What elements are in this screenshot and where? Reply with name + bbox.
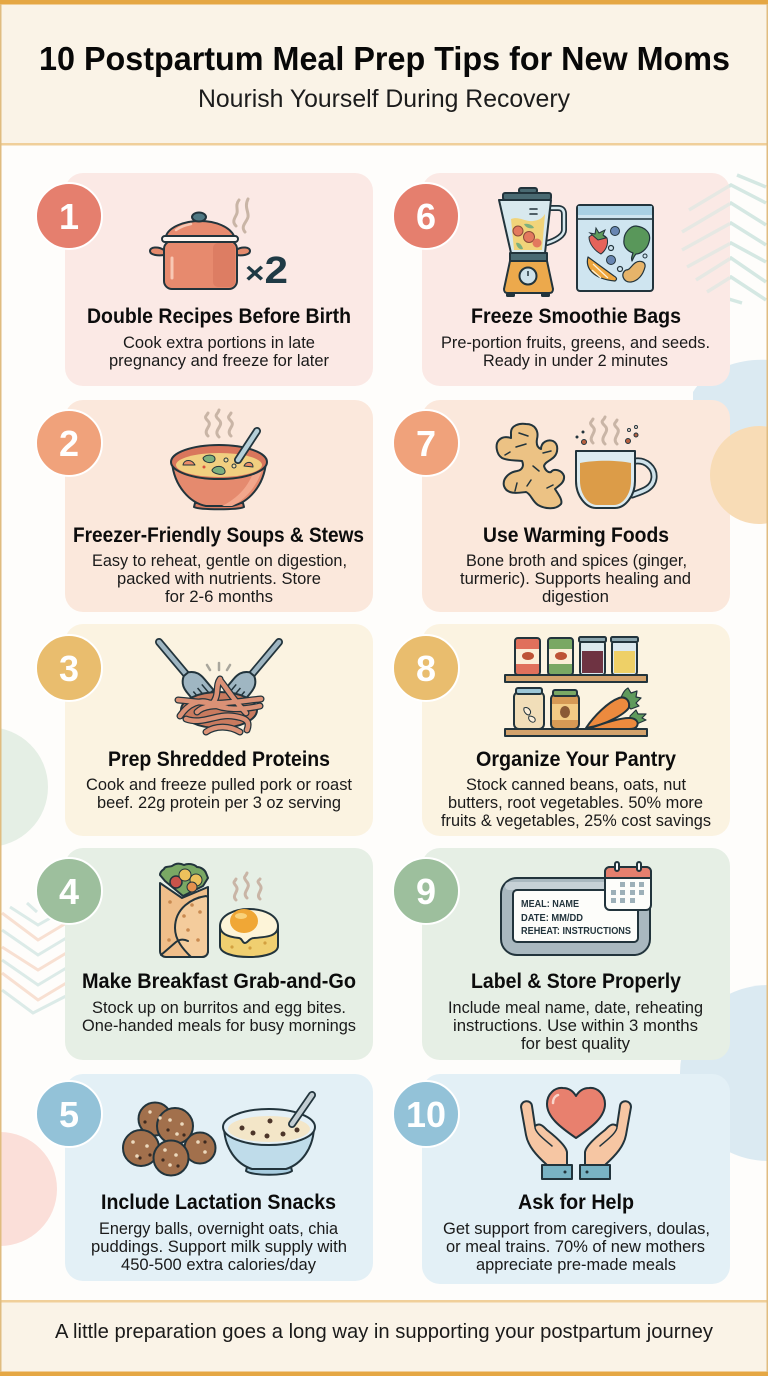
description: tip 6: Pre-portion fruits, greens, and seeds. [441,334,710,352]
heading: tip 5: Include Lactation Snacks [101,1191,336,1214]
description: tip 7 [460,552,691,606]
number badge 5: 5 [59,1094,79,1135]
number badge 8 [393,635,459,701]
number badge 3 [36,635,102,701]
description: tip 9: instructions. Use within 3 months [453,1017,698,1035]
description: tip 5 [91,1220,347,1274]
panel: tip 4 breakfast [36,848,373,1060]
icon: labelled container with calendar: MEAL: NAME [521,898,579,910]
description: tip 1: Cook extra portions in late [123,334,315,352]
description: tip 5: 450-500 extra calories/day [121,1256,317,1274]
panel: tip 2 soups [36,400,373,612]
heading: tip 9: Label & Store Properly [471,970,681,993]
icon: pantry shelves with jars and carrots [505,637,647,736]
icon: forks and shredded meat [151,635,287,732]
number badge 2: 2 [59,423,79,464]
number badge 5 [36,1081,102,1147]
description: tip 2: packed with nutrients. Store [117,570,321,588]
decoration: left chevrons [2,903,68,1013]
description: tip 3: beef. 22g protein per 3 oz serving [97,794,341,812]
description: tip 9: Include meal name, date, reheating [448,999,703,1017]
heading: tip 8: Organize Your Pantry [476,748,676,771]
description: tip 6: Ready in under 2 minutes [483,352,668,370]
description: tip 8: Stock canned beans, oats, nut [466,776,686,794]
description: tip 10 [443,1220,710,1274]
icon: hands holding heart [521,1088,631,1179]
icon: soup bowl with steam [171,410,267,509]
description: tip 7: Bone broth and spices (ginger, [466,552,687,570]
decoration: pink circle left [0,1132,57,1246]
panel: tip 9 label and store [393,848,730,1060]
panel: tip 8 pantry [393,624,730,836]
description: tip 9: for best quality [521,1035,631,1053]
decoration: green circle left [0,727,48,847]
icon: labelled container with calendar [501,862,651,955]
description: tip 9 [448,999,703,1053]
description: tip 1 [109,334,329,370]
title: 10 Postpartum Meal Prep Tips for New Moms [39,40,730,77]
description: tip 4 [82,999,356,1035]
heading: tip 7: Use Warming Foods [483,524,669,547]
number badge 8: 8 [416,648,436,689]
icon: pot with x2 [150,199,288,292]
number badge 1: 1 [59,196,79,237]
description: tip 10: Get support from caregivers, doulas, [443,1220,710,1238]
description: tip 10: or meal trains. 70% of new mothers [446,1238,705,1256]
subtitle: Nourish Yourself During Recovery [198,85,570,113]
number badge 2 [36,410,102,476]
panel: tip 3 shredded proteins [36,624,373,836]
heading: tip 3: Prep Shredded Proteins [108,748,330,771]
decoration: chevrons over card 6 [682,186,730,292]
number badge 3: 3 [59,648,79,689]
number badge 10 [393,1081,459,1147]
number badge 6 [393,183,459,249]
icon: blender and freezer bag [499,188,653,297]
number badge 7 [393,410,459,476]
icon: pot with x2: ×2 [245,250,288,292]
description: tip 4: One-handed meals for busy mornings [82,1017,356,1035]
description: tip 6 [441,334,710,370]
number badge 7: 7 [416,423,436,464]
heading: tip 4: Make Breakfast Grab-and-Go [82,970,356,993]
decoration: orange circle right [710,426,768,524]
heading: tip 10: Ask for Help [518,1191,634,1214]
description: tip 3 [86,776,352,812]
number badge 9: 9 [416,871,436,912]
description: tip 8: butters, root vegetables. 50% more [448,794,703,812]
number badge 10: 10 [406,1094,446,1135]
description: tip 3: Cook and freeze pulled pork or roast [86,776,352,794]
panel: tip 1 double recipes [36,173,373,386]
description: tip 2: Easy to reheat, gentle on digestion, [92,552,347,570]
panel: tip 6 smoothie bags [393,173,730,386]
description: tip 7: turmeric). Supports healing and [460,570,691,588]
decoration: blue circle lower right [680,985,768,1161]
description: tip 4: Stock up on burritos and egg bites. [92,999,346,1017]
description: tip 1: pregnancy and freeze for later [109,352,329,370]
description: tip 7: digestion [542,588,609,606]
icon: burrito and egg bite [160,864,278,957]
description: tip 2: for 2-6 months [165,588,273,606]
heading: tip 6: Freeze Smoothie Bags [471,305,681,328]
description: tip 2 [92,552,347,606]
description: tip 10: appreciate pre-made meals [476,1256,676,1274]
number badge 4 [36,858,102,924]
footer banner [0,1300,768,1376]
description: tip 5: Energy balls, overnight oats, chia [99,1220,339,1238]
decoration: blue circle upper right [693,360,768,470]
heading: tip 1: Double Recipes Before Birth [87,305,351,328]
icon: labelled container with calendar: REHEAT: INSTRUCTIONS [521,925,631,937]
description: tip 5: puddings. Support milk supply with [91,1238,347,1256]
description: tip 8 [441,776,711,830]
icon: ginger and mug of broth [497,417,654,508]
footer message: A little preparation goes a long way in supporting your postpartum journey [55,1321,713,1343]
icon: energy balls and oats bowl [123,1095,315,1176]
icon: labelled container with calendar: DATE: MM/DD [521,912,583,924]
number badge 4: 4 [59,871,79,912]
panel: tip 7 warming foods [393,400,730,612]
number badge 1 [36,183,102,249]
heading: tip 2: Freezer-Friendly Soups & Stews [73,524,364,547]
header banner [0,0,768,146]
number badge 9 [393,858,459,924]
number badge 6: 6 [416,196,436,237]
panel: tip 5 lactation snacks [36,1074,373,1281]
panel: tip 10 ask for help [393,1074,730,1284]
description: tip 8: fruits & vegetables, 25% cost savings [441,812,711,830]
decoration: right chevrons [682,175,766,303]
